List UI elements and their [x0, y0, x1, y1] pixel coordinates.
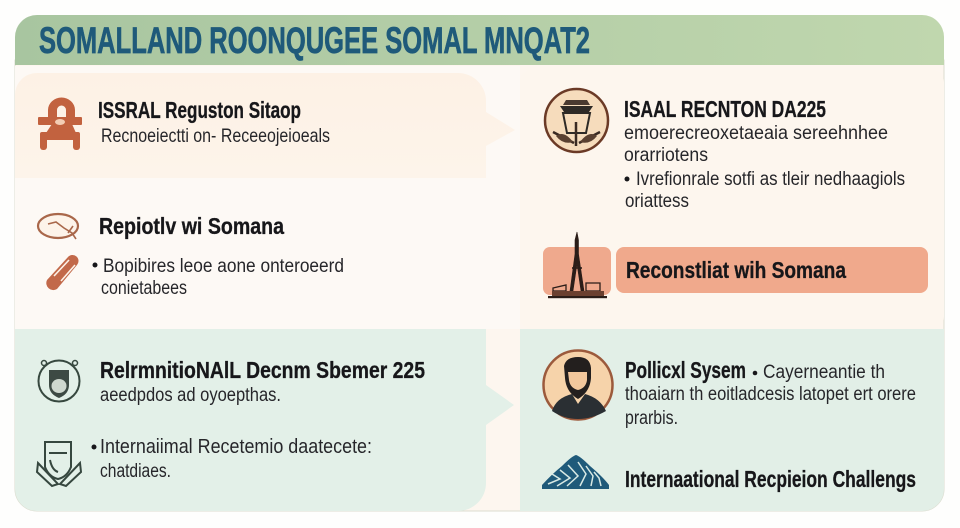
icon: shield with crossed blades	[37, 442, 81, 486]
heading and text: thoaiarn th eoitladcesis latopet ert orere	[625, 384, 916, 405]
heading and text: prarbis.	[625, 408, 678, 429]
icon: oval	[38, 214, 78, 239]
title: SOMALLAND ROONQUGEE SOMAL MNQAT2	[39, 20, 590, 61]
icon: blue mountain	[542, 455, 609, 489]
heading and text	[625, 357, 916, 429]
panel: bottom right	[520, 329, 944, 511]
icon: round crest	[38, 360, 80, 402]
icon: tower	[548, 232, 607, 298]
heading: RelrmnitioNAlL Decnm Sbemer 225	[100, 357, 425, 383]
text block: aeedpdos ad oyoepthas.	[100, 385, 281, 406]
icon: medallion	[545, 89, 608, 152]
panel: bottom left	[15, 329, 514, 511]
text block: Ivrefionrale sotfi as tleir nedhaagiols	[636, 169, 905, 190]
icon: pencil	[46, 255, 79, 290]
text block	[92, 256, 344, 299]
heading: Repiotlv wi Somana	[99, 213, 284, 239]
icon: portrait	[544, 350, 612, 420]
callout heading: Reconstliat wih Somana	[626, 257, 846, 283]
text block: Bopibires leoe aone onteroeerd	[103, 256, 344, 277]
text block: Internaiimal Recetemio daatecete:	[100, 436, 372, 458]
text block: orarriotens	[624, 145, 708, 166]
heading and text: Pollicxl Sysem	[625, 357, 746, 383]
icon: bench arch	[38, 98, 82, 150]
text block: Recnoeiectti on- Receeojeioeals	[101, 126, 330, 147]
heading: ISSRAL Reguston Sitaop	[98, 97, 301, 123]
callout bar	[543, 247, 928, 295]
text block: oriattess	[625, 191, 689, 212]
panel: top right	[520, 70, 944, 329]
text block	[92, 436, 372, 482]
text block: emoerecreoxetaeaia sereehnhee	[624, 123, 888, 144]
text block: conietabees	[101, 278, 187, 299]
text block	[624, 123, 905, 212]
panel: top left	[15, 66, 520, 329]
heading and text: Cayerneantie th	[763, 362, 885, 383]
title banner	[15, 15, 944, 65]
text block: chatdiaes.	[100, 461, 171, 482]
heading: ISAAL RECNTON DA225	[624, 96, 826, 122]
